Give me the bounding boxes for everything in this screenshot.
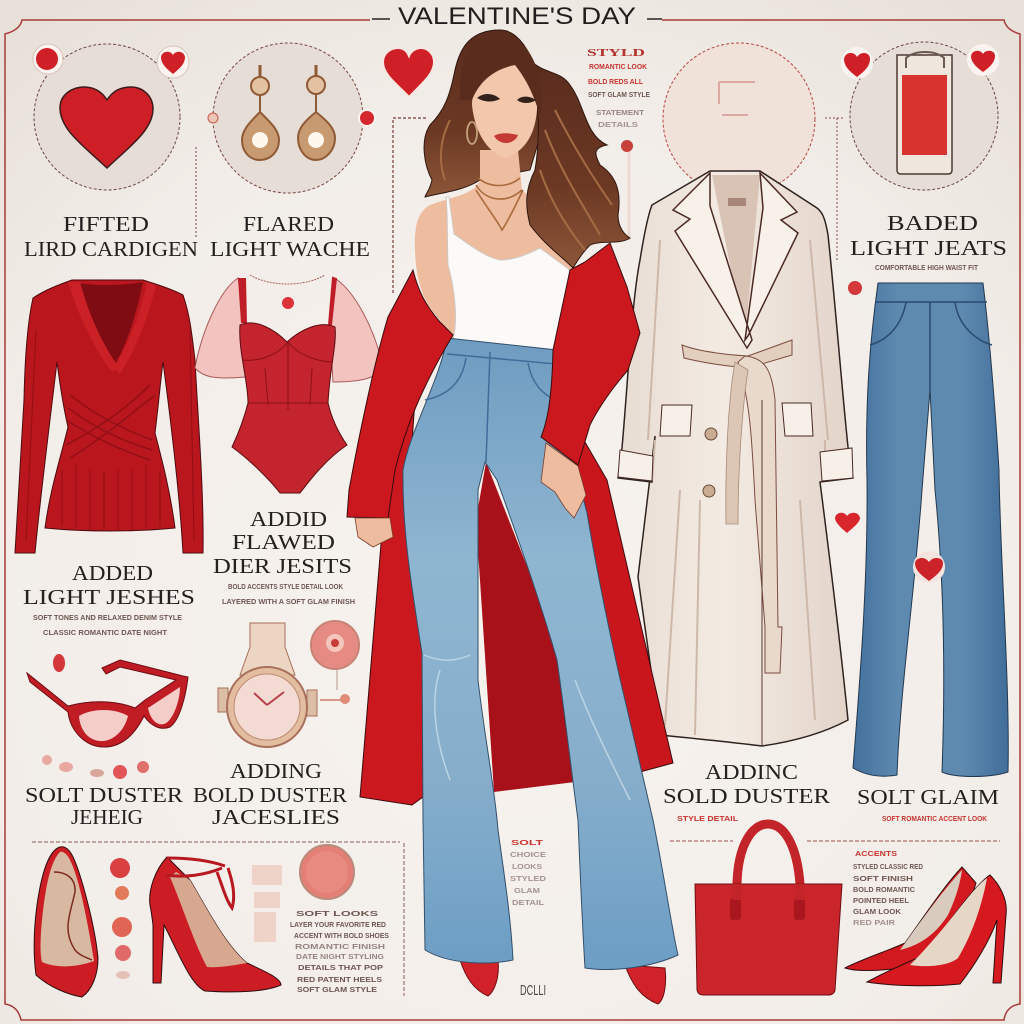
heading: solt duster jeheig: SOLT DUSTER (25, 783, 183, 807)
caption: center lower left: LOOKS (512, 864, 542, 871)
heading: adding sold duster (663, 760, 830, 808)
panel: earrings circle (213, 43, 363, 193)
heading: added flawed dier jesits (213, 507, 352, 578)
icon: heart near jeans (835, 513, 860, 533)
icon: heart badge near jeans (913, 551, 945, 583)
heading: added flawed dier jesits: FLAWED (232, 530, 335, 554)
coat lapels (673, 173, 798, 348)
jeans details (425, 352, 563, 462)
coat belt (682, 340, 792, 368)
title: VALENTINE'S DAY (398, 3, 636, 30)
figure: woman (347, 30, 678, 1004)
caption block: ACCENT WITH BOLD SHOES (294, 933, 389, 940)
caption block: ROMANTIC FINISH (295, 944, 385, 951)
caption: style note top: SOFT GLAM STYLE (588, 92, 650, 99)
caption block: SOFT TONES AND RELAXED DENIM STYLE (33, 615, 182, 622)
shoe: ankle strap heel (150, 857, 281, 992)
caption block: LAYERED WITH A SOFT GLAM FINISH (222, 599, 355, 606)
icon: red sunglasses (27, 660, 188, 747)
cardigan neckline (72, 282, 143, 368)
caption block: DATE NIGHT STYLING (296, 954, 385, 961)
shoe: red pump (34, 847, 98, 997)
caption block: SOFT ROMANTIC ACCENT LOOK (882, 816, 987, 823)
caption block (222, 584, 355, 606)
caption block (290, 911, 389, 994)
caption block: CLASSIC ROMANTIC DATE NIGHT (43, 630, 168, 637)
icon: small heart badge right (157, 46, 189, 78)
blouse dot (282, 297, 294, 309)
icon: lipstick card (897, 55, 952, 174)
heading: baded light jeats: BADED (887, 211, 978, 235)
heading: adding sold duster: SOLD DUSTER (663, 784, 830, 808)
heading: flared light wache: LIGHT WACHE (210, 237, 370, 261)
caption block: SOFT LOOKS (296, 911, 379, 918)
icon: rose gold watch (218, 623, 317, 747)
right sleeve (541, 243, 640, 465)
icon: small hearts column (110, 858, 132, 979)
caption block: ACCENTS (855, 851, 897, 858)
caption: center lower left: DETAIL (512, 900, 545, 907)
caption block: BOLD ROMANTIC (853, 887, 915, 894)
heading: flared light wache (210, 212, 370, 261)
jeans knee highlights (424, 655, 630, 800)
icon: heart medallion (311, 621, 359, 690)
bodysuit straps (238, 277, 337, 325)
white tank top (446, 197, 570, 350)
neck and skin (415, 150, 575, 350)
icon: right earring (298, 65, 335, 160)
earring hoop (467, 122, 477, 144)
hands (355, 443, 586, 547)
caption block: BOLD ACCENTS STYLE DETAIL LOOK (228, 584, 343, 591)
caption block: RED PATENT HEELS (297, 977, 382, 984)
heading: baded light jeats: LIGHT JEATS (850, 236, 1007, 260)
arrow: watch pointer (320, 694, 350, 704)
divider: lower right (670, 840, 1000, 842)
shoe: red stilettos pair (845, 867, 1006, 986)
caption: style note top: DETAILS (598, 122, 638, 129)
coat buttons (703, 428, 717, 497)
icon: large heart (60, 87, 153, 168)
heading: added light jeshes: LIGHT JESHES (23, 585, 195, 609)
caption block: DETAILS THAT POP (298, 965, 383, 972)
cardigan wrap folds (66, 385, 155, 460)
caption: center lower left: GLAM (514, 888, 540, 895)
garment: flared jeans (853, 283, 1008, 776)
icon: left earring (242, 65, 279, 160)
caption block: STYLE DETAIL (677, 816, 739, 823)
caption block: GLAM LOOK (853, 909, 901, 916)
heading: fitted lird cardigen: LIRD CARDIGEN (24, 237, 198, 261)
left sleeve (347, 270, 453, 518)
faint stamp (252, 865, 282, 942)
bodysuit body (232, 323, 347, 493)
heart above figure (383, 48, 434, 97)
heading: adding bold duster jacesles (193, 759, 347, 829)
connector: first column (195, 147, 197, 237)
icon: round blush compact (300, 845, 354, 899)
garment: cream trench coat (618, 171, 853, 746)
caption block: LAYER YOUR FAVORITE RED (290, 922, 386, 929)
panel: product circle (850, 42, 998, 190)
heading: baded light jeats (850, 211, 1007, 260)
hair strands (441, 110, 612, 250)
caption block: STYLED CLASSIC RED (853, 864, 923, 871)
panel: coat circle (663, 43, 815, 195)
caption: style note top (587, 47, 650, 129)
coat lining (712, 175, 760, 340)
red duster left panel (360, 330, 425, 805)
caption: center lower left: SOLT (511, 840, 544, 847)
icon: heart badge right (967, 44, 999, 76)
caption block: RED PAIR (853, 920, 895, 927)
connector: heart to figure (393, 118, 427, 293)
cardigan ribbing (26, 330, 194, 540)
heading: added light jeshes: ADDED (72, 561, 153, 585)
heading: adding bold duster jacesles: ADDING (230, 759, 322, 783)
heading: fitted lird cardigen (24, 212, 198, 261)
heading: flared light wache: FLARED (243, 212, 334, 236)
caption: style note top: STYLD (587, 47, 645, 59)
heading: solt duster jeheig (25, 783, 183, 829)
coat pockets (660, 403, 813, 436)
icon: connector dots (208, 110, 375, 126)
heading: solt glaim: SOLT GLAIM (857, 785, 999, 809)
caption block: POINTED HEEL (853, 898, 910, 905)
caption: style note top: ROMANTIC LOOK (589, 64, 647, 71)
heading: fitted lird cardigen: FIFTED (63, 212, 149, 236)
icon: heart badge left (841, 47, 873, 79)
hair front drape (527, 60, 630, 268)
icon: red tote bag (695, 824, 842, 995)
heading: adding bold duster jacesles: JACESLIES (212, 805, 340, 829)
garment: red cardigan (15, 280, 203, 553)
divider: lower left frame (32, 842, 404, 996)
caption block (33, 615, 182, 637)
caption block: SOFT FINISH (853, 876, 913, 883)
face (472, 65, 537, 158)
icon: small heart near figure (621, 140, 633, 240)
red shoes (460, 960, 666, 1004)
jeans (403, 338, 678, 969)
caption block: COMFORTABLE HIGH WAIST FIT (875, 265, 979, 272)
panel: coat circle sketch (719, 82, 755, 115)
necklace (476, 178, 523, 230)
caption block: SOFT GLAM STYLE (297, 987, 377, 994)
caption block (853, 851, 923, 927)
heading: adding sold duster: ADDINC (705, 760, 798, 784)
coat streaks (648, 240, 828, 735)
heading: solt duster jeheig: JEHEIG (71, 805, 143, 829)
panel: heart circle (34, 44, 180, 190)
facial features (477, 94, 536, 143)
caption: center lower left: CHOICE (510, 852, 546, 859)
icon: small heart badge left (33, 44, 63, 74)
caption: center lower left (510, 840, 546, 907)
cardigan wrap front (68, 282, 156, 374)
garment: pink blouse and red bodysuit (195, 275, 383, 493)
heading: added flawed dier jesits: ADDID (250, 507, 327, 531)
icon: small decorative hearts (42, 654, 149, 779)
red duster right panel (575, 430, 673, 772)
red duster centre panel (476, 462, 575, 792)
caption: style note top: STATEMENT (596, 110, 645, 117)
caption: center lower left: STYLED (510, 876, 546, 883)
connector: right column (825, 118, 845, 260)
caption: style note top: BOLD REDS ALL (588, 79, 644, 86)
hair crown (460, 33, 542, 115)
icon: small heart near jeans (848, 281, 862, 295)
heading: adding bold duster jacesles: BOLD DUSTER (193, 783, 347, 807)
heading: added light jeshes (23, 561, 195, 609)
label: bottom center: DCLLI (520, 982, 546, 999)
coat cuffs (618, 448, 853, 481)
hair back (424, 30, 545, 197)
heading: added flawed dier jesits: DIER JESITS (213, 554, 352, 578)
